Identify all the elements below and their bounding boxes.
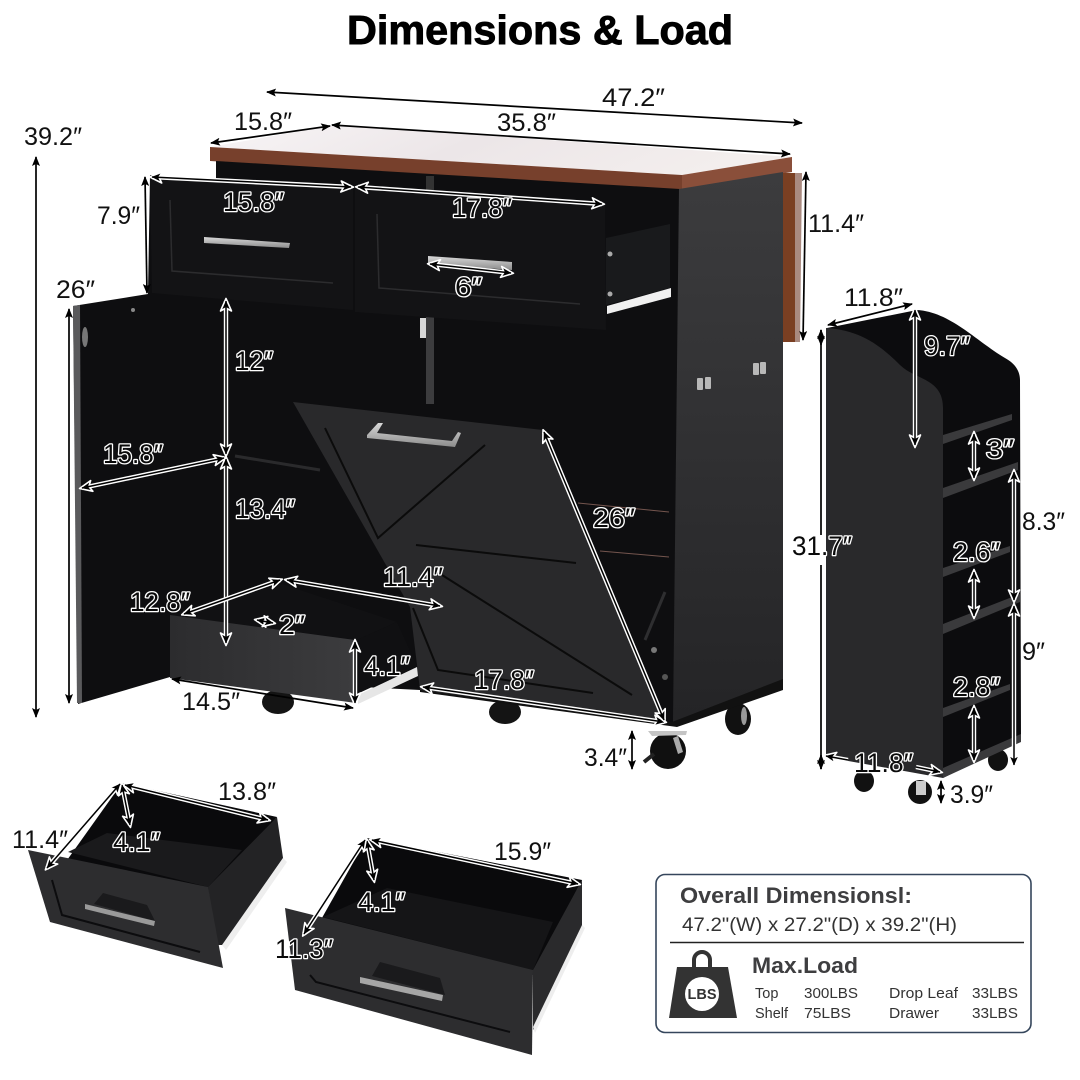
dimension: 6 handle: 6″	[455, 272, 482, 302]
center post and shelves	[235, 176, 669, 680]
dimension: 3 shelf gap: 3″	[986, 434, 1014, 464]
dimension: 11.4 drop leaf: 11.4″	[808, 210, 864, 238]
dimension: 17.8 hamper width	[423, 665, 664, 722]
dimension: 17.8 hamper width: 17.8″	[474, 665, 534, 695]
dimension: 31.7 shelf height: 31.7″	[792, 531, 852, 561]
top right drawer	[355, 188, 671, 330]
table: load ratings	[755, 986, 1018, 1022]
shelves	[943, 414, 1021, 778]
dimension: 2 gap	[257, 610, 305, 640]
panel: overall dimensions and max load	[656, 874, 1031, 1032]
dimension: 15.9 large drawer: 15.9″	[494, 838, 551, 866]
dimension: 39.2 height: 39.2″	[24, 123, 82, 151]
illustration: side shelf unit	[826, 310, 1021, 804]
dimension: 8.3 shelf bay: 8.3″	[1022, 508, 1065, 536]
dimension: 15.8 door width: 15.8″	[103, 439, 163, 469]
dimension: 15.8 left drawer	[152, 177, 351, 217]
dimension: 11.4 small drawer: 11.4″	[12, 826, 68, 854]
dimension: 13.8 small drawer	[125, 778, 276, 820]
dimension: 11.3 large drawer	[275, 840, 365, 964]
dimension: 4.1 small drawer	[113, 785, 160, 857]
hinges	[697, 362, 766, 390]
dimension: 11.4 small drawer	[12, 784, 120, 868]
dimension: 9 shelf bay: 9″	[1022, 638, 1045, 666]
dimension: 3.4 wheel	[584, 731, 632, 772]
dimension: 15.8 depth: 15.8″	[234, 108, 292, 136]
dimension: 11.4 drop leaf	[803, 172, 864, 340]
dimension: 2.8 shelf gap	[953, 672, 1000, 760]
dimension: 7.9 drawer height: 7.9″	[97, 202, 140, 230]
text: overall measurements: 47.2"(W) x 27.2"(D) x 39.2"(H)	[682, 915, 957, 936]
icon: rear wheels	[262, 690, 751, 735]
dimension: 2.6 shelf gap: 2.6″	[953, 537, 1000, 567]
dimension: 35.8 width: 35.8″	[497, 109, 556, 137]
dimension: 4.1 large drawer: 4.1″	[358, 887, 405, 917]
worktop	[210, 125, 792, 190]
cabinet base	[420, 679, 783, 727]
table: load ratings: Drop Leaf	[889, 986, 959, 1002]
tilt-out hamper door	[293, 402, 667, 723]
illustration: kitchen cart	[73, 125, 802, 769]
dimension: 4.1 large drawer	[358, 841, 405, 917]
table: load ratings: 75LBS	[804, 1006, 851, 1022]
dimension: 26 hamper length	[544, 432, 664, 720]
dimension: 26 door height: 26″	[56, 276, 95, 304]
dimension: 4.1 small drawer: 4.1″	[113, 827, 160, 857]
dimension: 11.4 drawer width: 11.4″	[383, 562, 443, 592]
table: load ratings: 300LBS	[804, 986, 858, 1002]
table: load ratings: 33LBS	[972, 1006, 1018, 1022]
dimension: 6 handle	[430, 264, 511, 302]
dimension: 11.8 shelf base: 11.8″	[854, 748, 913, 778]
dimension: 3.9 wheel: 3.9″	[950, 781, 993, 809]
dimension: 11.4 drawer width	[287, 562, 443, 606]
dimension: 11.8 shelf base	[826, 748, 940, 778]
drop leaf	[783, 173, 802, 342]
dimension: 17.8 right drawer	[358, 187, 602, 223]
pull-out bottom drawer	[170, 584, 418, 704]
dimension: 12.8 drawer depth: 12.8″	[130, 587, 190, 617]
title: Dimensions & Load	[347, 7, 733, 53]
heading: overall dimensions: Overall Dimensionsl:	[680, 883, 912, 908]
dimension: 15.8 depth	[211, 108, 330, 143]
shelf side panel	[826, 328, 943, 778]
dimension: 7.9 drawer height	[97, 177, 147, 293]
table: load ratings: 33LBS	[972, 986, 1018, 1002]
dimension: 12.8 drawer depth	[130, 580, 280, 617]
table: load ratings: Drawer	[889, 1006, 939, 1022]
dimension: 15.8 left drawer: 15.8″	[223, 187, 284, 217]
icon: front caster	[644, 731, 687, 769]
dimension: 47.2 width: 47.2″	[602, 84, 665, 112]
dimension: 3.4 wheel: 3.4″	[584, 744, 627, 772]
dimension: 4.1 drawer height: 4.1″	[364, 651, 410, 681]
top left drawer	[150, 175, 353, 310]
icon: weight LBS: LBS	[688, 987, 717, 1003]
dimension: 35.8 width	[332, 109, 790, 154]
illustration: small drawer	[28, 783, 287, 968]
shelf back	[827, 310, 1021, 778]
dimension: 11.3 large drawer: 11.3″	[275, 934, 333, 964]
door edge	[73, 305, 135, 703]
dimension: 26 hamper length: 26″	[593, 503, 635, 533]
dimension: 3 shelf gap	[974, 434, 1014, 478]
icon: shelf wheels	[854, 749, 1008, 804]
dimension: 15.9 large drawer	[372, 838, 578, 884]
dimension: 9.7 shelf top: 9.7″	[924, 331, 970, 361]
dimension: 2.8 shelf gap: 2.8″	[953, 672, 1000, 702]
dimension: 2.6 shelf gap	[953, 537, 1000, 616]
dimension: 2 gap: 2″	[279, 610, 305, 640]
dimension: 11.8 shelf depth: 11.8″	[844, 284, 903, 312]
cabinet body interior	[73, 161, 680, 726]
dimension: 4.1 drawer height	[355, 642, 410, 703]
illustration: large drawer	[285, 838, 585, 1055]
table: load ratings: Top	[755, 986, 778, 1002]
table: load ratings: Shelf	[755, 1006, 789, 1022]
icon: weight LBS	[669, 952, 737, 1018]
dimension: 17.8 right drawer: 17.8″	[452, 193, 512, 223]
dimension: 14.5 drawer front: 14.5″	[182, 688, 240, 716]
heading: max load: Max.Load	[752, 953, 858, 978]
dimension: 8.3 shelf bay	[1014, 472, 1065, 600]
dimension: 11.8 shelf depth	[828, 284, 912, 325]
dimension: 13.8 small drawer: 13.8″	[218, 778, 276, 806]
dimension: 9.7 shelf top	[915, 310, 970, 445]
dimension: 13.4 lower door: 13.4″	[235, 494, 295, 524]
dimension: 14.5 drawer front	[172, 679, 353, 716]
dimension: 12 upper door: 12″	[235, 346, 273, 376]
dimension: 47.2 width	[267, 84, 802, 123]
dimension: 15.8 door width	[82, 439, 224, 488]
cabinet side panel	[673, 172, 783, 722]
